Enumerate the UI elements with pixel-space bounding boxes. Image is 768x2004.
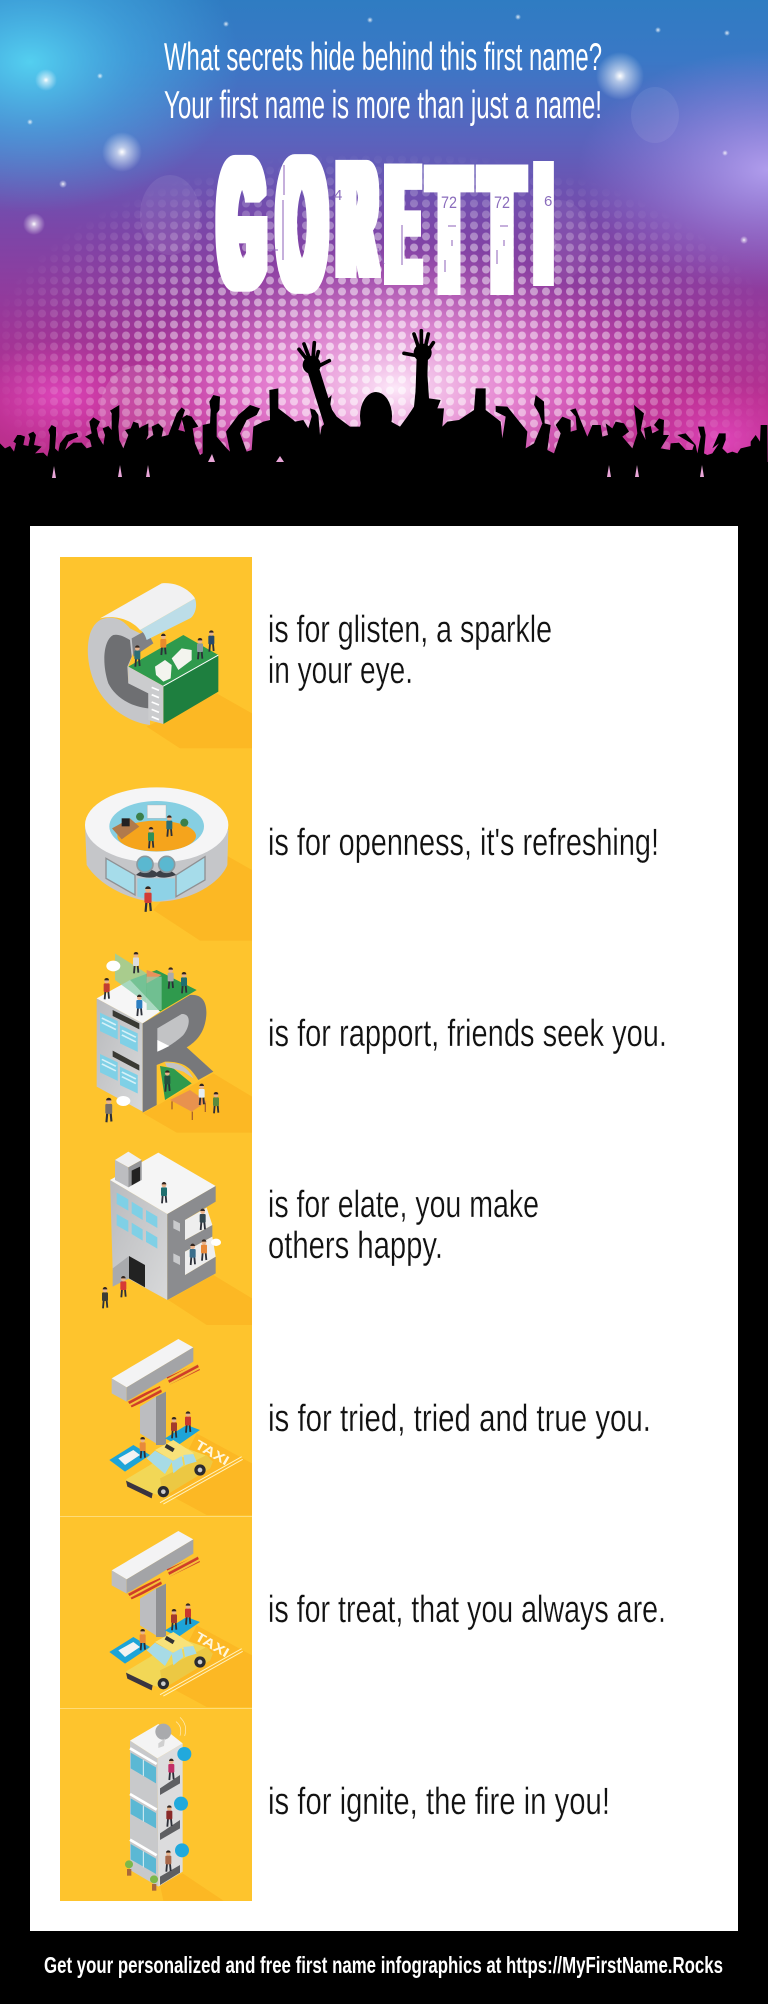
name title: GORETTI: 4 xyxy=(334,187,342,204)
name title: GORETTI: O xyxy=(279,121,325,328)
text: O line: is for openness, it's refreshing! xyxy=(268,822,659,864)
tile divider xyxy=(60,1516,252,1517)
name title: GORETTI: E xyxy=(388,132,418,316)
tile divider xyxy=(60,1708,252,1709)
yellow illustration column xyxy=(60,557,252,1901)
name title: GORETTI: R xyxy=(339,129,375,308)
tile: letter I tower xyxy=(125,1717,223,1901)
tile: letter T with taxi (second T) xyxy=(109,1531,252,1707)
name title: GORETTI: 6 xyxy=(544,193,552,210)
tile: letter G building xyxy=(88,583,252,748)
text: I line: is for ignite, the fire in you! xyxy=(268,1781,610,1823)
text: G line: in your eye. xyxy=(268,650,413,692)
header: concert stage background xyxy=(0,0,768,462)
tile: letter O building xyxy=(85,787,252,941)
main white panel xyxy=(30,526,738,1931)
name title: GORETTI: G xyxy=(220,121,264,325)
name title: GORETTI xyxy=(220,121,552,329)
tile: letter T with taxi (first T): TAXI xyxy=(193,1437,232,1468)
crowd silhouette xyxy=(0,331,768,526)
text: G line: is for glisten, a sparkle xyxy=(268,609,552,651)
name title: GORETTI: 72 xyxy=(441,193,457,212)
tile: letter T with taxi (second T): TAXI xyxy=(193,1629,232,1660)
header tagline xyxy=(164,36,602,127)
name title: GORETTI: T xyxy=(430,130,468,329)
text: E line: others happy. xyxy=(268,1225,443,1267)
name title: GORETTI: T xyxy=(482,130,522,329)
tile: letter R building xyxy=(97,952,252,1133)
text: first T line: is for tried, tried and true you. xyxy=(268,1398,651,1440)
tile: letter T with taxi (first T) xyxy=(109,1339,252,1515)
tile: letter E building xyxy=(102,1152,252,1325)
name title: GORETTI: 72 xyxy=(494,193,510,212)
text: I xyxy=(537,129,550,319)
text: G line xyxy=(268,609,552,692)
text: E line: is for elate, you make xyxy=(268,1184,539,1226)
text: E line xyxy=(268,1184,539,1267)
